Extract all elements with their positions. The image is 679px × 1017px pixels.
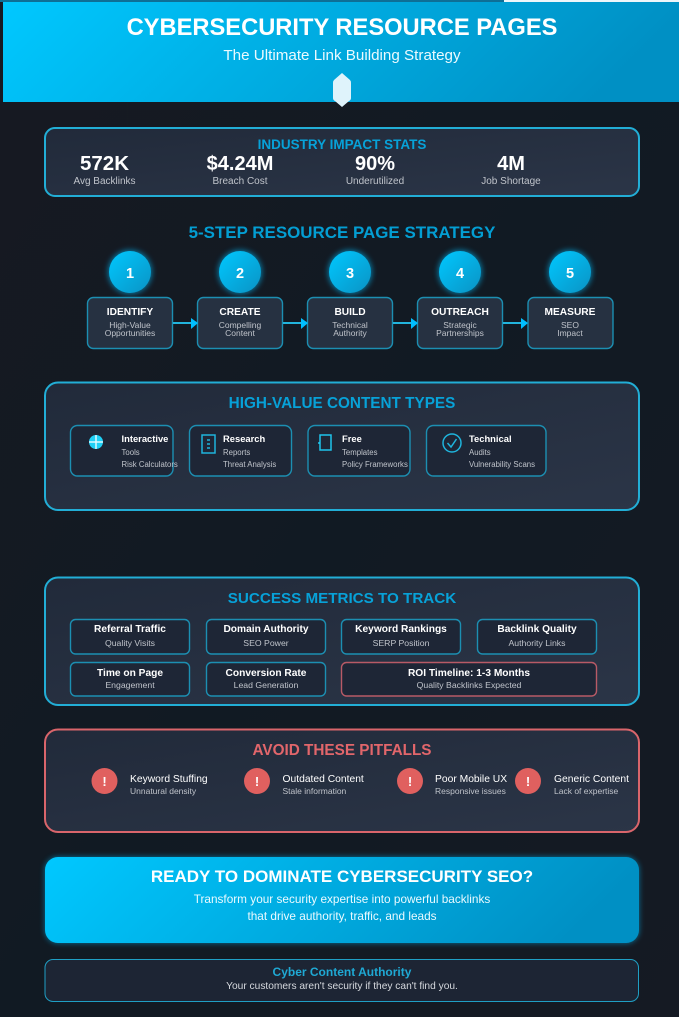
arrow: 4 to 5 xyxy=(503,318,528,329)
heading: success metrics: SUCCESS METRICS TO TRACK xyxy=(228,590,456,607)
step 4: OUTREACH xyxy=(431,307,489,318)
card: free: Templates xyxy=(342,448,378,457)
step 3: Technical xyxy=(332,320,368,330)
CTA heading: READY TO DOMINATE CYBERSECURITY SEO? xyxy=(151,867,533,886)
step 1: High-Value xyxy=(109,320,151,330)
card: research: Threat Analysis xyxy=(223,460,276,469)
stat: 572K: Avg Backlinks xyxy=(73,176,136,187)
stat: breach cost xyxy=(207,153,273,187)
panel: high-value content types xyxy=(45,382,639,510)
step 4: 4 xyxy=(456,266,464,282)
step 3: Authority xyxy=(333,328,368,338)
step flow xyxy=(88,250,613,348)
metric: keyword rankings: SERP Position xyxy=(373,638,430,648)
card: free: Free xyxy=(342,433,362,444)
heading: 5-step strategy: 5-STEP RESOURCE PAGE STRATEGY xyxy=(189,223,496,242)
stat: breach cost: $4.24M xyxy=(207,153,273,175)
step 5: MEASURE xyxy=(545,307,596,318)
step 1: 1 xyxy=(126,266,134,282)
step 2: CREATE xyxy=(219,307,261,318)
arrow: 1 to 2 xyxy=(173,318,198,329)
icon: shield marker xyxy=(333,73,351,107)
pitfall: keyword stuffing xyxy=(92,768,208,796)
card: research: Research xyxy=(223,433,265,444)
metric: domain authority: Domain Authority xyxy=(223,624,309,635)
panel: industry impact stats xyxy=(45,128,639,196)
stat: underutilized: 90% xyxy=(355,153,395,175)
icon: template xyxy=(319,435,331,450)
title: CYBERSECURITY RESOURCE PAGES xyxy=(127,15,557,41)
pitfall: outdated content: Stale information xyxy=(282,786,347,796)
arrow: 2 to 3 xyxy=(283,318,308,329)
metric: time on page xyxy=(70,662,190,696)
step 4 xyxy=(418,250,502,348)
step 4: Strategic xyxy=(443,320,478,330)
footer panel xyxy=(45,960,638,1002)
icon: plus circle xyxy=(89,435,103,449)
card: research xyxy=(190,426,292,476)
step 5: Impact xyxy=(557,328,583,338)
pitfall: poor mobile UX: Responsive issues xyxy=(435,786,506,796)
icon: check circle xyxy=(443,434,461,452)
step 4: Partnerships xyxy=(436,328,484,338)
step 1 xyxy=(88,250,172,348)
pitfall: keyword stuffing: Keyword Stuffing xyxy=(130,774,208,785)
card: technical: Audits xyxy=(469,448,491,457)
panel: success metrics xyxy=(45,578,639,705)
footer brand: Cyber Content Authority xyxy=(273,965,412,979)
card: research: Reports xyxy=(223,448,250,457)
card: technical: Technical xyxy=(469,433,512,444)
metric: time on page: Engagement xyxy=(105,680,155,690)
metric: conversion rate: Lead Generation xyxy=(234,680,299,690)
step 3 xyxy=(308,250,392,348)
step 2: 2 xyxy=(236,266,244,282)
pitfall: outdated content xyxy=(244,768,364,796)
arrow: 3 to 4 xyxy=(393,318,418,329)
step 2: Compelling xyxy=(219,320,262,330)
metric: referral traffic: Referral Traffic xyxy=(94,624,166,635)
metric: referral traffic: Quality Visits xyxy=(105,638,156,648)
header banner xyxy=(3,2,679,107)
pitfall: outdated content: ! xyxy=(255,774,259,789)
stat: job shortage: Job Shortage xyxy=(481,176,541,187)
card: technical: Vulnerability Scans xyxy=(469,460,535,469)
metric: backlink quality: Backlink Quality xyxy=(497,624,577,635)
stat: 572K xyxy=(73,152,136,187)
metric: backlink quality: Authority Links xyxy=(509,638,566,648)
pitfall: poor mobile UX xyxy=(397,768,507,796)
metric: domain authority xyxy=(206,620,326,654)
stat: breach cost: Breach Cost xyxy=(212,176,268,187)
pitfall: generic content: ! xyxy=(526,774,530,789)
stat: job shortage xyxy=(481,153,541,187)
card: interactive: Risk Calculators xyxy=(122,460,178,469)
pitfall: keyword stuffing: ! xyxy=(102,774,107,789)
icon: document xyxy=(202,435,215,453)
stat: underutilized: Underutilized xyxy=(346,176,404,187)
metric: domain authority: SEO Power xyxy=(243,638,289,648)
metric: referral traffic xyxy=(70,620,190,654)
metric: keyword rankings xyxy=(342,620,460,654)
footer tagline: Your customers aren't security if they can't find you. xyxy=(226,981,458,992)
CTA text: that drive authority, traffic, and leads xyxy=(247,909,437,923)
CTA text xyxy=(194,892,490,923)
metric: conversion rate xyxy=(206,662,326,696)
metric: keyword rankings: Keyword Rankings xyxy=(355,624,447,635)
subtitle: The Ultimate Link Building Strategy xyxy=(223,47,461,64)
heading: pitfalls: AVOID THESE PITFALLS xyxy=(252,742,432,759)
card: free xyxy=(308,426,410,476)
CTA text: Transform your security expertise into powerful backlinks xyxy=(194,892,490,906)
card: interactive: Tools xyxy=(122,448,140,457)
panel: pitfalls xyxy=(45,730,639,832)
step 2 xyxy=(198,250,282,348)
step 5 xyxy=(528,250,613,348)
step 1: Opportunities xyxy=(105,328,155,338)
stat: job shortage: 4M xyxy=(497,153,525,175)
pitfall: generic content: Generic Content xyxy=(554,774,629,785)
top edge strip xyxy=(0,0,679,2)
step 3: BUILD xyxy=(334,307,366,318)
step 3: 3 xyxy=(346,266,354,282)
pitfall: keyword stuffing: Unnatural density xyxy=(130,786,197,796)
pitfall: poor mobile UX: ! xyxy=(408,774,412,789)
metric: conversion rate: Conversion Rate xyxy=(226,668,307,679)
step 5: 5 xyxy=(566,266,574,282)
pitfall: outdated content: Outdated Content xyxy=(282,774,364,785)
step 1: IDENTIFY xyxy=(107,307,153,318)
step 2: Content xyxy=(225,328,256,338)
stat: 572K: 572K xyxy=(80,152,129,175)
call to action banner xyxy=(45,857,639,943)
pitfall: generic content: Lack of expertise xyxy=(554,786,619,796)
pitfall: generic content xyxy=(515,768,629,796)
heading: stats: INDUSTRY IMPACT STATS xyxy=(258,137,426,152)
metric: ROI timeline: Quality Backlinks Expected xyxy=(417,680,522,690)
metric: ROI timeline xyxy=(342,662,596,696)
card: interactive: Interactive xyxy=(122,433,168,444)
metric: backlink quality xyxy=(478,620,596,654)
metric: ROI timeline: ROI Timeline: 1-3 Months xyxy=(408,668,530,679)
stat: underutilized xyxy=(346,153,404,187)
card: free: Policy Frameworks xyxy=(342,460,408,469)
step 5: SEO xyxy=(561,320,579,330)
heading: content types: HIGH-VALUE CONTENT TYPES xyxy=(229,395,455,412)
metric: time on page: Time on Page xyxy=(97,668,163,679)
card: technical xyxy=(426,426,546,476)
pitfall: poor mobile UX: Poor Mobile UX xyxy=(435,774,507,785)
card: interactive xyxy=(70,426,178,476)
